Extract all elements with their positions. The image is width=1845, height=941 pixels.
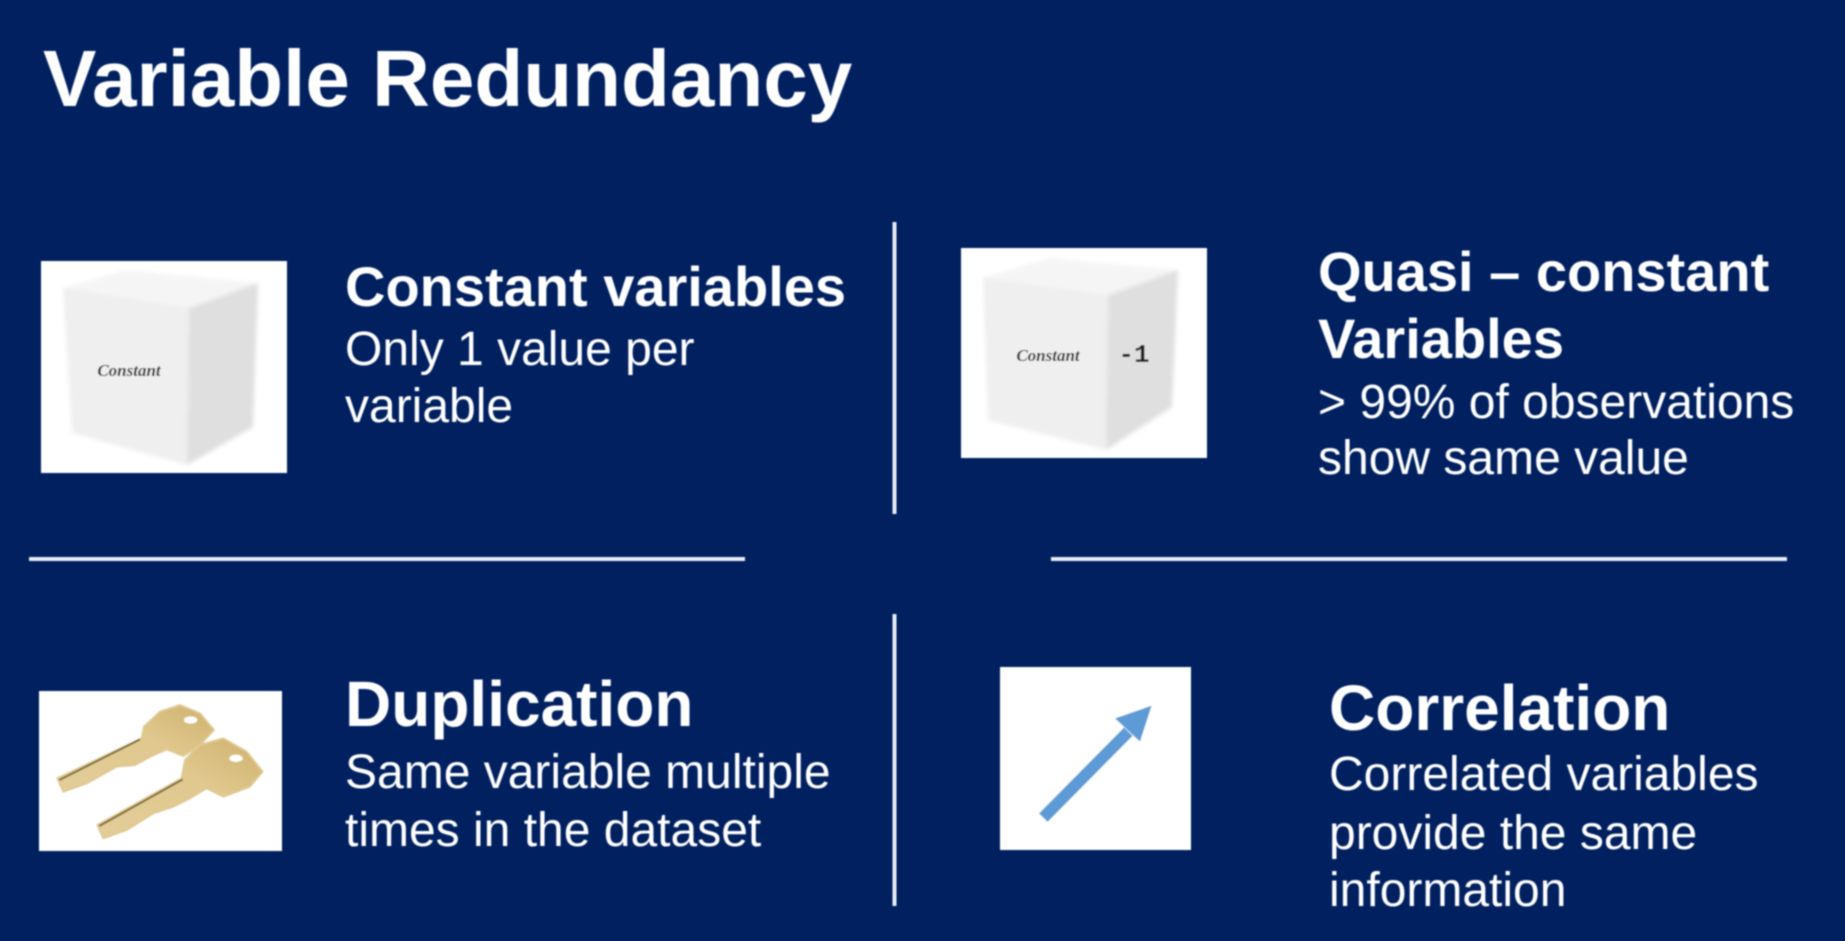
panel: duplication (39, 668, 831, 857)
text: constant description: variable (345, 380, 513, 433)
text: duplication description: times in the dataset (345, 804, 761, 857)
text: correlation description: provide the same (1329, 807, 1697, 860)
title: Variable Redundancy (43, 34, 853, 123)
text: constant description: Only 1 value per (345, 323, 695, 376)
panel: constant variables (41, 255, 846, 473)
icon: correlation arrow (1000, 667, 1191, 850)
heading: correlation: Correlation (1329, 672, 1670, 744)
text: correlation description: information (1329, 864, 1566, 917)
text: quasi-constant description: show same value (1318, 432, 1689, 485)
icon: constant cube (41, 261, 287, 473)
panel: correlation (1000, 667, 1759, 917)
heading: constant variables: Constant variables (345, 255, 846, 318)
text: quasi-constant description: > 99% of observations (1318, 376, 1794, 429)
heading: quasi-constant variables: Variables (1318, 307, 1564, 370)
icon: quasi-constant cube: -1 (1118, 340, 1150, 370)
panel: quasi-constant variables (961, 240, 1794, 485)
icon: two keys (39, 691, 282, 851)
heading: quasi-constant variables: Quasi – constant (1318, 240, 1769, 303)
text: correlation description: Correlated variables (1329, 748, 1759, 801)
icon: quasi-constant cube: Constant (1016, 346, 1081, 365)
heading: duplication: Duplication (345, 668, 693, 740)
icon: quasi-constant cube (961, 248, 1207, 458)
text: duplication description: Same variable multiple (345, 746, 831, 799)
icon: constant cube: Constant (97, 361, 162, 380)
